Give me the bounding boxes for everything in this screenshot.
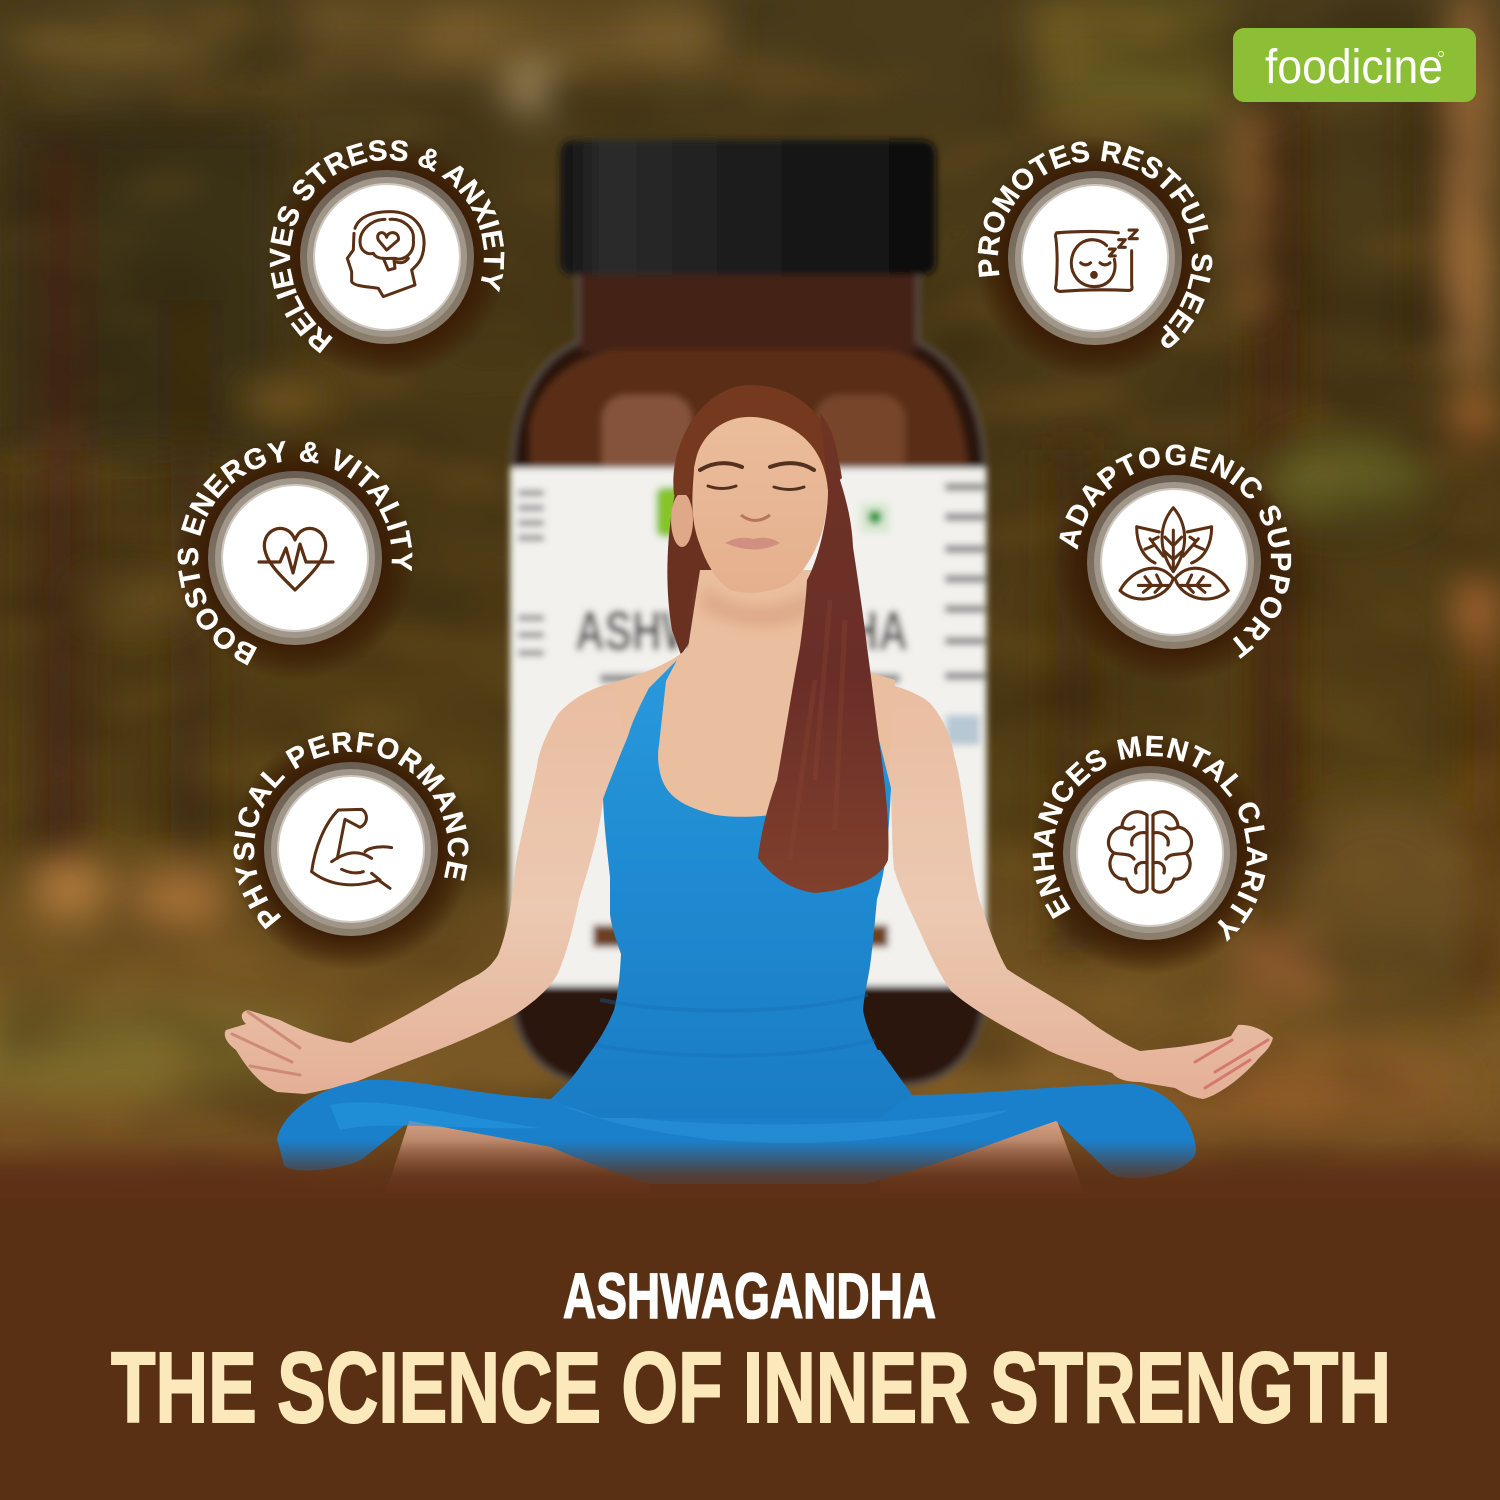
bottle label bbox=[510, 468, 986, 986]
badge: physical performance: PHYSICAL PERFORMANCE bbox=[234, 732, 468, 930]
ear bbox=[671, 493, 693, 547]
badge: boosts energy and vitality: BOOSTS ENERGY & VITALITY bbox=[178, 440, 412, 666]
neck and chest bbox=[615, 570, 895, 830]
product bottle: ASHWAGANDHA bbox=[575, 599, 908, 662]
eyes and brows bbox=[700, 463, 814, 490]
woman meditating bbox=[225, 385, 1273, 1195]
right hand fingers bbox=[1195, 1040, 1268, 1088]
right arm bbox=[860, 678, 1273, 1099]
icon: brain bbox=[1108, 812, 1192, 892]
subtitle: ASHWAGANDHA bbox=[563, 1260, 936, 1332]
left hand fingers bbox=[232, 1012, 300, 1075]
product bottle bbox=[510, 140, 986, 1085]
calf shadows bbox=[385, 1118, 650, 1195]
bottle cap bbox=[560, 140, 936, 275]
icon: sleeping face on pillow bbox=[1055, 230, 1137, 291]
face bbox=[692, 412, 828, 593]
icon: adaptogen leaves bbox=[1120, 508, 1228, 599]
hair back bbox=[667, 420, 730, 655]
logo: foodicine bbox=[1233, 28, 1476, 102]
badge: adaptogenic support: ADAPTOGENIC SUPPORT bbox=[1059, 444, 1292, 659]
nose and lips bbox=[741, 515, 770, 520]
icon: flexed bicep bbox=[312, 809, 392, 888]
hair top bbox=[673, 385, 842, 495]
long hair bbox=[758, 413, 889, 893]
left arm bbox=[225, 682, 640, 1094]
bottle glass bbox=[512, 270, 985, 1085]
blue tank top bbox=[551, 660, 912, 1118]
icon: head with heart brain bbox=[347, 212, 424, 297]
bottom fade bbox=[0, 1140, 1500, 1200]
logo: foodicine: foodicine bbox=[1265, 41, 1443, 94]
blue leggings bbox=[277, 1050, 1196, 1184]
icon: heart with pulse bbox=[259, 528, 333, 590]
badge: enhances mental clarity: ENHANCES MENTAL CLARITY bbox=[1032, 736, 1268, 942]
badge: relieves stress and anxiety: RELIEVES STRESS & ANXIETY bbox=[270, 140, 504, 354]
badge: promotes restful sleep: PROMOTES RESTFUL SLEEP bbox=[978, 140, 1212, 348]
